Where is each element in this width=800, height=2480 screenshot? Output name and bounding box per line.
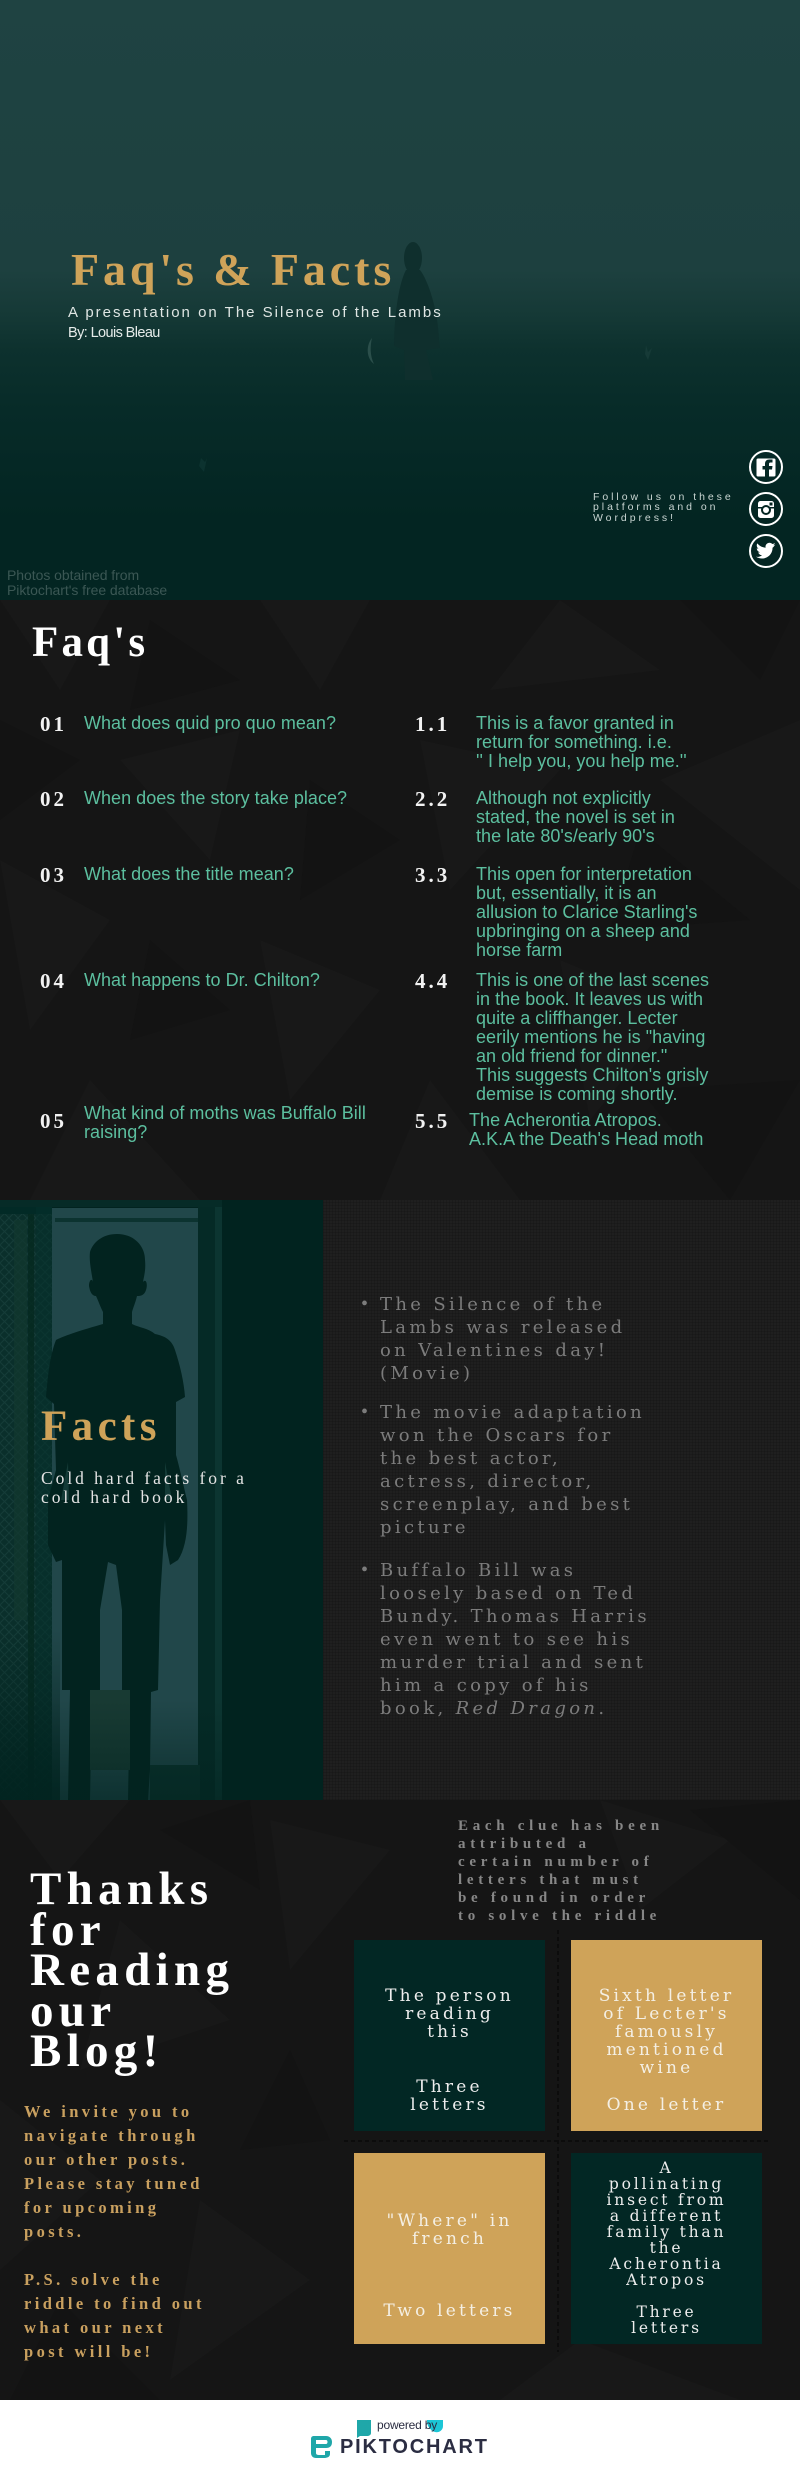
byline: By: Louis Bleau [68,325,160,341]
faq 5 answer: 5.5 [415,1109,450,1133]
bullet 1 [361,1293,625,1384]
faq 5 question: 05 [40,1109,67,1133]
clue box 3: "Where" in [386,2211,513,2231]
clue box 2: mentioned [606,2040,727,2060]
riddle intro: attributed a [458,1836,591,1852]
invitation text: P.S. solve the [24,2270,163,2289]
faq 5 question [40,1103,366,1142]
bullet 3: book, Red Dragon. [380,1698,607,1719]
clue box 2: One letter [607,2095,726,2115]
subheading: Cold hard facts for a [41,1468,247,1488]
clue box 4: letters [631,2319,702,2337]
clue box 4: a different [610,2207,723,2225]
faq 2 answer: 2.2 [415,787,450,811]
panel: facts image [0,1200,323,1800]
faq 1 question: What does quid pro quo mean? [84,713,336,733]
photo credit: Piktochart's free database [7,582,167,598]
follow text: platforms and on [593,501,718,513]
clue box 4 [571,2153,762,2344]
clue box 1: letters [410,2095,489,2115]
clue box 4: family than [607,2223,726,2241]
faq 2 question: When does the story take place? [84,788,347,808]
invitation text: posts. [24,2222,84,2241]
background pattern [0,600,800,1200]
invitation text: riddle to find out [24,2294,205,2313]
invitation text: post will be! [24,2342,153,2361]
icon: twitter [749,534,783,568]
clue box 4: Three [636,2303,697,2321]
faq 3 answer: allusion to Clarice Starling's [476,902,697,922]
faq 4 answer: an old friend for dinner." [476,1046,667,1066]
faq 4 answer: quite a cliffhanger. Lecter [476,1008,678,1028]
bullet 2: the best actor, [380,1448,561,1469]
invitation text [24,2102,205,2361]
faq 2 question: 02 [40,787,67,811]
bullet 2 [361,1401,645,1538]
bullet 1: on Valentines day! [380,1340,608,1361]
bullet 3: Bundy. Thomas Harris [380,1606,650,1627]
faq 4 answer: This is one of the last scenes [476,970,709,990]
faq 5 question: raising? [84,1122,147,1142]
bullet 1: (Movie) [380,1363,473,1384]
faq 3 answer: horse farm [476,940,562,960]
title: Faq's & Facts [71,244,395,295]
riddle intro: be found in order [458,1890,650,1906]
image: foggy field with silhouette [200,242,652,472]
bullet 3: Buffalo Bill was [380,1560,576,1581]
heading: our [30,1984,116,2036]
follow text [593,491,734,524]
clue box 1 [354,1940,545,2131]
faq 3 question: What does the title mean? [84,864,294,884]
follow text: Follow us on these [593,491,734,503]
bullet 3: • [361,1559,368,1581]
invitation text: navigate through [24,2126,199,2145]
clue box 1: The person [385,1986,514,2006]
faq 4 answer: This suggests Chilton's grisly [476,1065,708,1085]
clue box 1: Three [416,2077,483,2097]
faq 1 answer: 1.1 [415,712,450,736]
logo mark [311,2420,443,2458]
photo credit: Photos obtained from [7,567,139,583]
heading: Facts [41,1403,161,1450]
faq 2 answer: Although not explicitly [476,788,651,808]
clue box 2: famously [615,2022,718,2042]
bullet 1: The Silence of the [380,1294,606,1315]
clue box 4: Atropos [626,2271,707,2289]
faq 3 answer: upbringing on a sheep and [476,921,690,941]
photo credit [7,567,167,598]
subheading: cold hard book [41,1487,187,1507]
bullet 1: • [361,1293,368,1315]
faq 3 answer: This open for interpretation [476,864,692,884]
clue box 3: french [412,2229,487,2249]
divider lines [344,1930,768,2352]
clue box 1: this [427,2022,472,2042]
faq 2 answer: the late 80's/early 90's [476,826,655,846]
clue box 1: reading [405,2004,494,2024]
faq 3 question: 03 [40,863,67,887]
faq 5 answer: The Acherontia Atropos. [469,1110,662,1130]
faq 3 question [40,863,294,887]
heading [30,1863,234,2077]
subheading [41,1468,247,1507]
icon: instagram [749,492,783,526]
invitation text: We invite you to [24,2102,193,2121]
riddle intro: certain number of [458,1854,653,1870]
wordmark: PIKTOCHART [340,2436,489,2458]
riddle intro: to solve the riddle [458,1908,661,1924]
faq 1 question: 01 [40,712,67,736]
faq 5 answer: A.K.A the Death's Head moth [469,1129,703,1149]
clue box 2 [571,1940,762,2131]
heading: Blog! [30,2025,164,2077]
image: silhouette in doorway [0,1207,222,1800]
bullet 1: Lambs was released [380,1317,625,1338]
faq 1 answer: return for something. i.e. [476,732,672,752]
icon: facebook [749,450,783,484]
faq 1 answer [415,712,687,771]
faq 1 answer: '' I help you, you help me.'' [476,751,687,771]
clue box 4: insect from [607,2191,726,2209]
faq 5 question: What kind of moths was Buffalo Bill [84,1103,366,1123]
faq 3 answer: but, essentially, it is an [476,883,657,903]
bullet 2: screenplay, and best [380,1494,633,1515]
bullet 3: loosely based on Ted [380,1583,636,1604]
faq 4 answer: 4.4 [415,969,450,993]
clue box 2: Sixth letter [599,1986,734,2006]
bullet 3: him a copy of his [380,1675,592,1696]
faq 4 question: 04 [40,969,67,993]
clue box 2: of Lecter's [603,2004,730,2024]
invitation text: what our next [24,2318,166,2337]
bullet 2: won the Oscars for [380,1425,614,1446]
heading: Reading [30,1944,234,1996]
faq 2 answer: stated, the novel is set in [476,807,675,827]
bullet 2: • [361,1401,368,1423]
riddle intro: letters that must [458,1872,643,1888]
background pattern [344,1930,768,2352]
invitation text: Please stay tuned [24,2174,203,2193]
heading: Thanks [30,1863,213,1915]
heading: for [30,1904,106,1956]
faq 3 answer: 3.3 [415,863,450,887]
clue box 4: the [650,2239,683,2257]
clue box 3: Two letters [383,2301,516,2321]
clue box 3 [354,2153,545,2344]
riddle intro: Each clue has been [458,1818,664,1834]
follow text: Wordpress! [593,512,676,524]
subtitle: A presentation on The Silence of the Lambs [68,304,443,321]
panel: faqs [0,600,800,1200]
footer: piktochart logo [0,2400,800,2480]
clue box 2: wine [640,2058,693,2078]
faq 1 answer: This is a favor granted in [476,713,674,733]
powered by: powered by [377,2418,437,2432]
faq 4 answer: in the book. It leaves us with [476,989,703,1009]
faq 4 question: What happens to Dr. Chilton? [84,970,320,990]
bullet 2: picture [380,1517,469,1538]
panel: hero [0,0,800,600]
faq 4 answer: demise is coming shortly. [476,1084,677,1104]
faq 3 answer [415,863,697,960]
bullet 3 [361,1559,650,1719]
clue box 4: A [660,2159,674,2177]
faq 4 answer: eerily mentions he is "having [476,1027,705,1047]
panel: facts list [323,1200,800,1800]
riddle intro [458,1818,664,1924]
bullet 3: murder trial and sent [380,1652,646,1673]
faq 4 answer [415,969,709,1104]
bullet 3: even went to see his [380,1629,633,1650]
invitation text: for upcoming [24,2198,159,2217]
bullet 2: actress, director, [380,1471,595,1492]
panel: thanks and riddle [0,1800,800,2400]
clue box 4: Acherontia [609,2255,724,2273]
bullet 2: The movie adaptation [380,1402,645,1423]
faq 5 answer [415,1109,703,1149]
clue box 4: pollinating [609,2175,724,2193]
heading: Faq's [32,619,148,666]
faq 2 answer [415,787,675,846]
invitation text: our other posts. [24,2150,188,2169]
